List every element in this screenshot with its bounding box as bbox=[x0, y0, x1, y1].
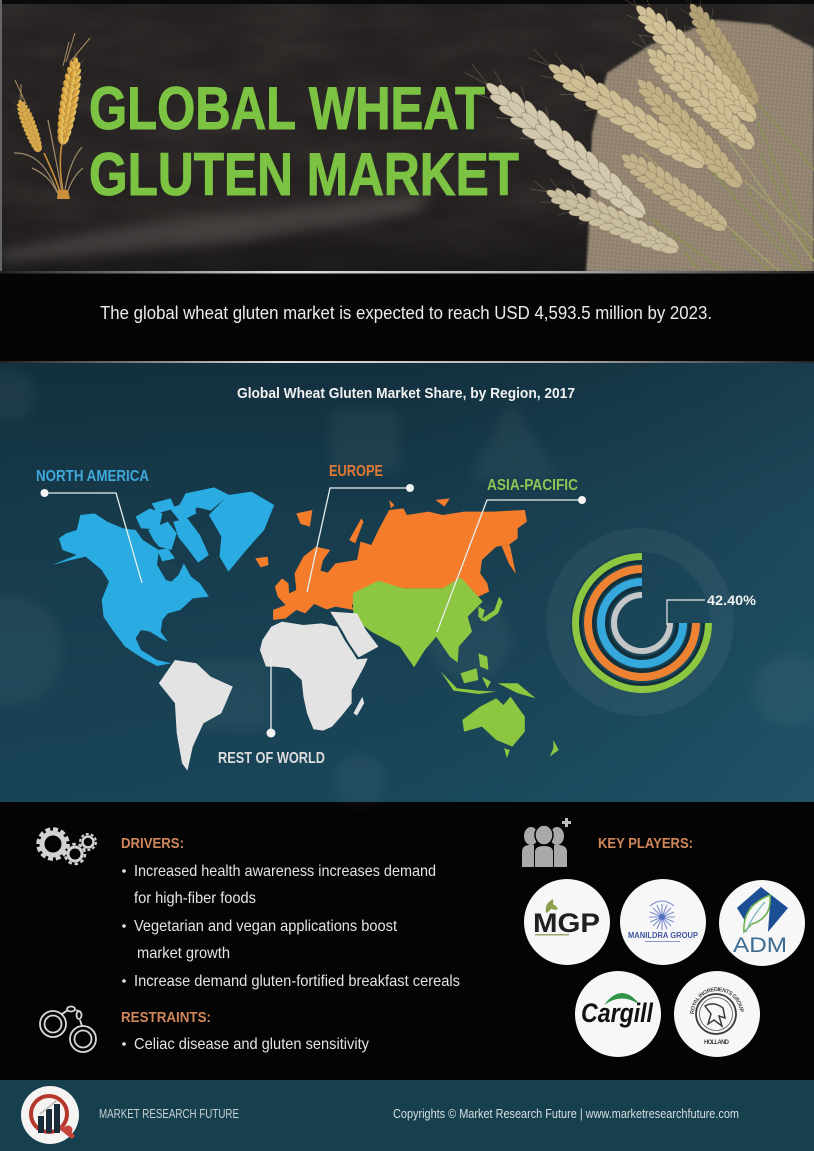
burlap cloth bbox=[586, 20, 814, 272]
icon: people group bbox=[522, 818, 571, 867]
copyright: Copyrights © Market Research Future | www.marketresearchfuture.com bbox=[393, 1106, 739, 1121]
panel: drivers and restraints bbox=[38, 829, 460, 1053]
drivers heading: DRIVERS: bbox=[121, 835, 184, 852]
logo: Royal Ingredients Group: ROYAL INGREDIENTS GROUP bbox=[690, 987, 744, 1014]
logo: ADM bbox=[719, 880, 805, 966]
restraints heading: RESTRAINTS: bbox=[121, 1009, 211, 1026]
header banner with wood background and wheat photo bbox=[0, 0, 814, 272]
black intro band bbox=[0, 271, 814, 362]
logo: ADM: ADM bbox=[733, 934, 787, 957]
logo: Manildra Group bbox=[620, 879, 706, 965]
logo: Royal Ingredients Group bbox=[674, 971, 760, 1057]
region: asia pacific bbox=[353, 577, 559, 758]
chart heading: Global Wheat Gluten Market Share, by Region, 2017 bbox=[237, 385, 575, 402]
icon: gears bbox=[38, 829, 96, 864]
region: europe and russia bbox=[255, 498, 527, 620]
logo: market research future bbox=[21, 1086, 79, 1144]
label: north america: NORTH AMERICA bbox=[36, 468, 149, 485]
title: GLUTEN MARKET bbox=[89, 141, 519, 208]
logo: MGP bbox=[524, 879, 610, 965]
footer band bbox=[0, 1080, 814, 1151]
leader: asia-pacific bbox=[437, 496, 586, 632]
panel: market share by region bbox=[0, 361, 814, 806]
logo: Cargill bbox=[575, 971, 661, 1057]
title: GLOBAL WHEAT bbox=[89, 75, 485, 142]
restraints list: Celiac disease and gluten sensitivity bbox=[134, 1036, 369, 1053]
drivers list: for high-fiber foods bbox=[134, 890, 256, 907]
intro sentence: The global wheat gluten market is expected to reach USD 4,593.5 million by 2023. bbox=[100, 303, 712, 323]
leader: europe bbox=[307, 484, 414, 592]
label: asia-pacific: ASIA-PACIFIC bbox=[487, 477, 578, 494]
region: north america bbox=[52, 487, 274, 666]
drivers list: Vegetarian and vegan applications boost bbox=[134, 918, 398, 935]
logo: Cargill: Cargill bbox=[581, 998, 653, 1028]
drivers list bbox=[122, 863, 460, 990]
drivers list: Increased health awareness increases demand bbox=[134, 863, 436, 880]
icon: handcuffs bbox=[40, 1006, 96, 1052]
value label: 42.40% bbox=[707, 592, 757, 608]
logo: Royal Ingredients Group: HOLLAND bbox=[704, 1040, 730, 1046]
wheat ears bbox=[455, 0, 770, 266]
leader: rest of world bbox=[266, 652, 276, 738]
logo: MGP: MGP bbox=[533, 908, 600, 938]
label: rest of world: REST OF WORLD bbox=[218, 750, 325, 767]
world map bbox=[52, 487, 559, 771]
wheat stems bbox=[640, 100, 814, 272]
region: rest of world bbox=[159, 612, 378, 771]
drivers list: market growth bbox=[137, 945, 230, 962]
greenland bbox=[209, 492, 274, 572]
radial chart bbox=[558, 540, 757, 704]
icon: golden wheat bbox=[9, 33, 90, 199]
drivers list: Increase demand gluten-fortified breakfast cereals bbox=[134, 973, 460, 990]
logo: Manildra Group: MANILDRA GROUP bbox=[628, 931, 699, 940]
key players heading: KEY PLAYERS: bbox=[598, 835, 693, 852]
label: europe: EUROPE bbox=[329, 463, 383, 480]
leader: north america bbox=[40, 489, 142, 583]
title bbox=[89, 75, 519, 208]
panel: key players bbox=[522, 818, 805, 1057]
brand name: MARKET RESEARCH FUTURE bbox=[99, 1106, 239, 1121]
